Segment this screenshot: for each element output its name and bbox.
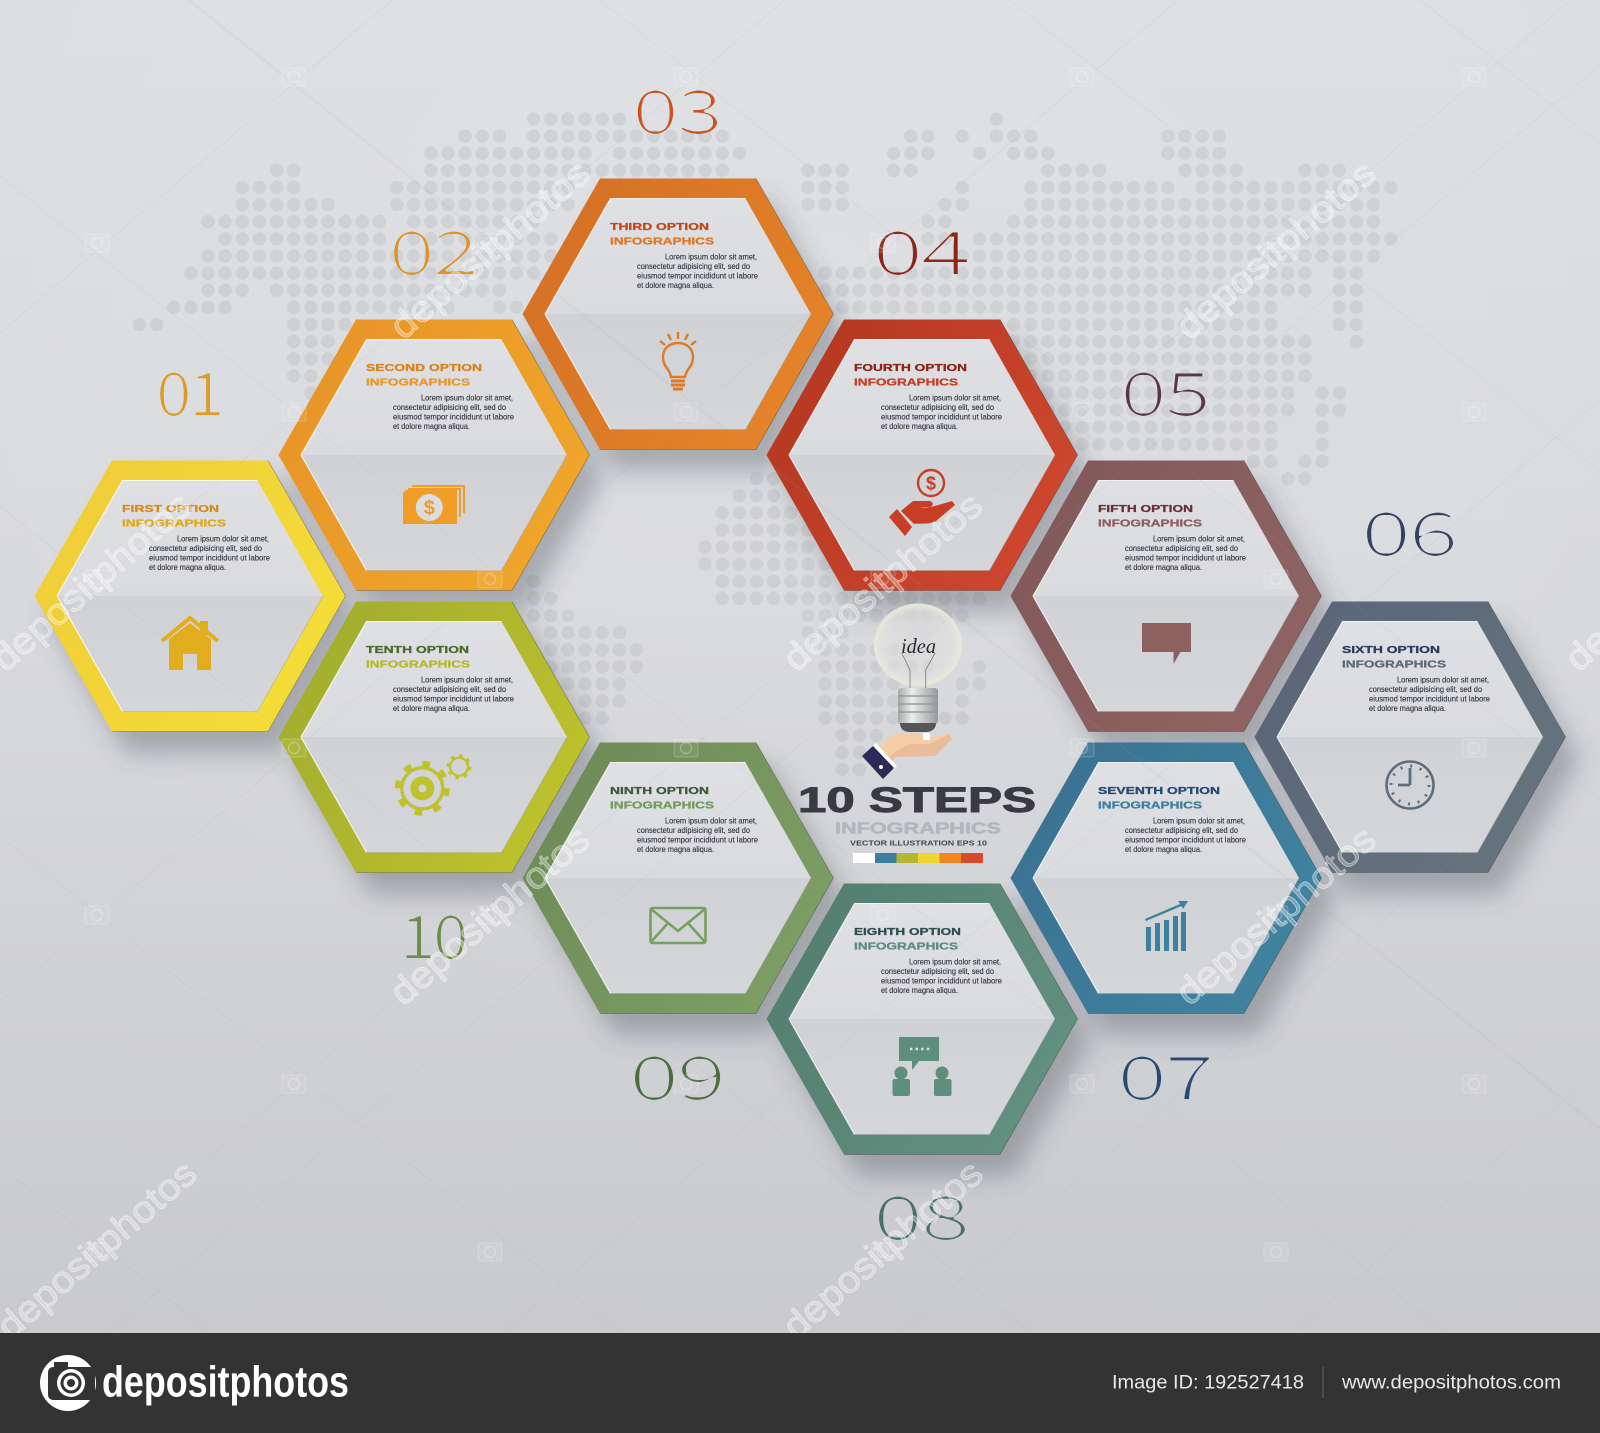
filament [902, 653, 935, 688]
title: 10 steps: 10 STEPS [798, 781, 1036, 820]
footer logo icon [40, 1355, 96, 1411]
body text: Lorem ipsum dolor sit amet, [421, 392, 513, 402]
body text: Lorem ipsum dolor sit amet, [1153, 816, 1245, 826]
body text: consectetur adipisicing elit, sed do [637, 261, 750, 271]
heading [1098, 504, 1202, 530]
heading: INFOGRAPHICS [1342, 660, 1446, 670]
body text: et dolore magna aliqua. [637, 280, 714, 290]
body text: consectetur adipisicing elit, sed do [637, 825, 750, 835]
center illustration: bulb on hand [862, 604, 962, 779]
heading: INFOGRAPHICS [854, 942, 958, 952]
body text: eiusmod tempor incididunt ut labore [1369, 694, 1490, 704]
body text: Lorem ipsum dolor sit amet, [665, 816, 757, 826]
body text: Lorem ipsum dolor sit amet, [1397, 674, 1489, 684]
hexagon frame [766, 320, 1078, 590]
heading [854, 927, 961, 952]
body text: Lorem ipsum dolor sit amet, [909, 956, 1001, 966]
hexagon frame [34, 460, 346, 732]
body text: consectetur adipisicing elit, sed do [149, 543, 262, 553]
body text: et dolore magna aliqua. [393, 421, 470, 431]
panel: step 8 eighth option [766, 884, 1078, 1154]
heading: SIXTH OPTION [1342, 645, 1440, 656]
body text: consectetur adipisicing elit, sed do [393, 402, 506, 412]
dotted world map [139, 119, 1391, 770]
body text [637, 252, 758, 290]
body text: Lorem ipsum dolor sit amet, [1153, 534, 1245, 544]
body text [149, 534, 270, 572]
heading [610, 786, 714, 812]
heading: INFOGRAPHICS [610, 800, 714, 812]
bulb base [898, 688, 938, 732]
heading: FIRST OPTION [122, 504, 219, 515]
hexagon shadows [48, 200, 1580, 1176]
number 10: 10 [400, 888, 466, 977]
hexagon frame [766, 884, 1078, 1154]
heading: INFOGRAPHICS [854, 378, 958, 388]
icon: banknotes: $ [424, 498, 435, 520]
icon: house [162, 618, 218, 670]
heading: FIFTH OPTION [1098, 504, 1193, 515]
body text [393, 674, 514, 713]
panel: step 2 second option [278, 320, 590, 590]
image id: Image ID: 192527418 [1112, 1372, 1304, 1394]
body text [1369, 674, 1490, 713]
body text: consectetur adipisicing elit, sed do [1369, 684, 1482, 694]
footer logo text: depositphotos [102, 1358, 349, 1406]
number 05: 05 [1120, 345, 1208, 434]
panel: step 3 third option [522, 178, 834, 450]
panel: step 1 first option [34, 460, 346, 732]
heading [366, 363, 482, 388]
body text: et dolore magna aliqua. [1125, 562, 1202, 572]
body text [1125, 534, 1246, 572]
hexagon frame [1254, 602, 1566, 872]
heading: INFOGRAPHICS [366, 660, 470, 670]
icon: envelope [650, 908, 706, 943]
body text: consectetur adipisicing elit, sed do [881, 966, 994, 976]
number 04: 04 [872, 204, 969, 293]
number 03: 03 [632, 63, 720, 152]
panel: step 4 fourth option [766, 320, 1078, 590]
bulb globe [874, 604, 962, 686]
heading: NINTH OPTION [610, 786, 709, 797]
icon: hand holding coin [889, 470, 955, 536]
heading: SECOND OPTION [366, 363, 482, 374]
heading: INFOGRAPHICS [366, 378, 470, 388]
panel: step 6 sixth option [1254, 602, 1566, 872]
body text: Lorem ipsum dolor sit amet, [177, 534, 269, 544]
watermark text: depositphotos [775, 1152, 990, 1347]
body text [881, 392, 1002, 431]
icon: two people talking [892, 1037, 952, 1096]
body text: Lorem ipsum dolor sit amet, [665, 252, 757, 262]
panel: step 5 fifth option [1010, 460, 1322, 732]
subtitle: infographics: INFOGRAPHICS [835, 820, 1001, 838]
watermark text: depositphotos [382, 152, 597, 347]
body text: et dolore magna aliqua. [881, 985, 958, 995]
body text: et dolore magna aliqua. [637, 844, 714, 854]
heading [610, 222, 714, 248]
website: www.depositphotos.com [1341, 1372, 1561, 1394]
body text: et dolore magna aliqua. [149, 562, 226, 572]
heading [1342, 645, 1446, 670]
heading [366, 645, 470, 670]
body text [881, 956, 1002, 995]
heading [854, 363, 967, 388]
hexagon frame [1010, 460, 1322, 732]
icon: banknotes [403, 485, 465, 524]
watermark text: depositphotos [775, 484, 990, 679]
body text: eiusmod tempor incididunt ut labore [637, 834, 758, 844]
heading: EIGHTH OPTION [854, 927, 961, 938]
body text: consectetur adipisicing elit, sed do [1125, 825, 1238, 835]
heading: SEVENTH OPTION [1098, 786, 1220, 797]
panel: step 10 tenth option [278, 602, 590, 872]
number 07: 07 [1116, 1029, 1212, 1118]
heading: FOURTH OPTION [854, 363, 967, 374]
watermark text: depositphotos [1168, 152, 1383, 347]
body text [393, 392, 514, 431]
hexagon frame [278, 602, 590, 872]
idea script: idea [901, 634, 936, 658]
icon: gears [398, 756, 470, 813]
watermark text: depositphotos [1168, 818, 1383, 1013]
body text: consectetur adipisicing elit, sed do [881, 402, 994, 412]
heading: TENTH OPTION [366, 645, 469, 656]
body text: Lorem ipsum dolor sit amet, [421, 674, 513, 684]
heading: INFOGRAPHICS [1098, 800, 1202, 812]
body text: eiusmod tempor incididunt ut labore [393, 412, 514, 422]
body text [1125, 816, 1246, 854]
hexagon frame [522, 178, 834, 450]
caption: VECTOR ILLUSTRATION EPS 10 [850, 838, 987, 848]
number 09: 09 [628, 1029, 724, 1118]
step numbers [156, 63, 1456, 1258]
body text: consectetur adipisicing elit, sed do [393, 684, 506, 694]
body text: eiusmod tempor incididunt ut labore [1125, 834, 1246, 844]
body text [637, 816, 758, 854]
colour bar [853, 853, 983, 863]
number 01: 01 [156, 345, 222, 434]
watermark camera stamps [85, 68, 1486, 1261]
body text: et dolore magna aliqua. [881, 421, 958, 431]
body text: eiusmod tempor incididunt ut labore [637, 270, 758, 280]
heading: THIRD OPTION [610, 222, 709, 233]
body text: et dolore magna aliqua. [1369, 703, 1446, 713]
icon: light bulb [660, 332, 696, 389]
icon: clock [1386, 762, 1434, 808]
hexagon frame [1010, 742, 1322, 1014]
heading [122, 504, 226, 530]
panel: step 7 seventh option [1010, 742, 1322, 1014]
number 06: 06 [1360, 485, 1456, 574]
body text: Lorem ipsum dolor sit amet, [909, 392, 1001, 402]
body text: eiusmod tempor incididunt ut labore [1125, 552, 1246, 562]
center title block [798, 781, 1036, 863]
icon: hand holding coin: $ [926, 474, 936, 494]
body text: et dolore magna aliqua. [393, 703, 470, 713]
body text: et dolore magna aliqua. [1125, 844, 1202, 854]
number 02: 02 [388, 204, 476, 293]
body text: eiusmod tempor incididunt ut labore [881, 412, 1002, 422]
number 08: 08 [872, 1169, 968, 1258]
hexagon frame [522, 742, 834, 1014]
footer bar [0, 1333, 1600, 1433]
hexagon frame [278, 320, 590, 590]
heading: INFOGRAPHICS [610, 236, 714, 248]
heading: INFOGRAPHICS [1098, 518, 1202, 530]
heading [1098, 786, 1220, 812]
body text: eiusmod tempor incididunt ut labore [149, 552, 270, 562]
body text: consectetur adipisicing elit, sed do [1125, 543, 1238, 553]
body text: eiusmod tempor incididunt ut labore [393, 694, 514, 704]
icon: speech bubble [1142, 623, 1191, 664]
heading: INFOGRAPHICS [122, 518, 226, 530]
panel: step 9 ninth option [522, 742, 834, 1014]
watermark text: depositphotos [382, 818, 597, 1013]
body text: eiusmod tempor incididunt ut labore [881, 976, 1002, 986]
icon: rising bar chart [1145, 901, 1188, 951]
hand [862, 733, 952, 779]
